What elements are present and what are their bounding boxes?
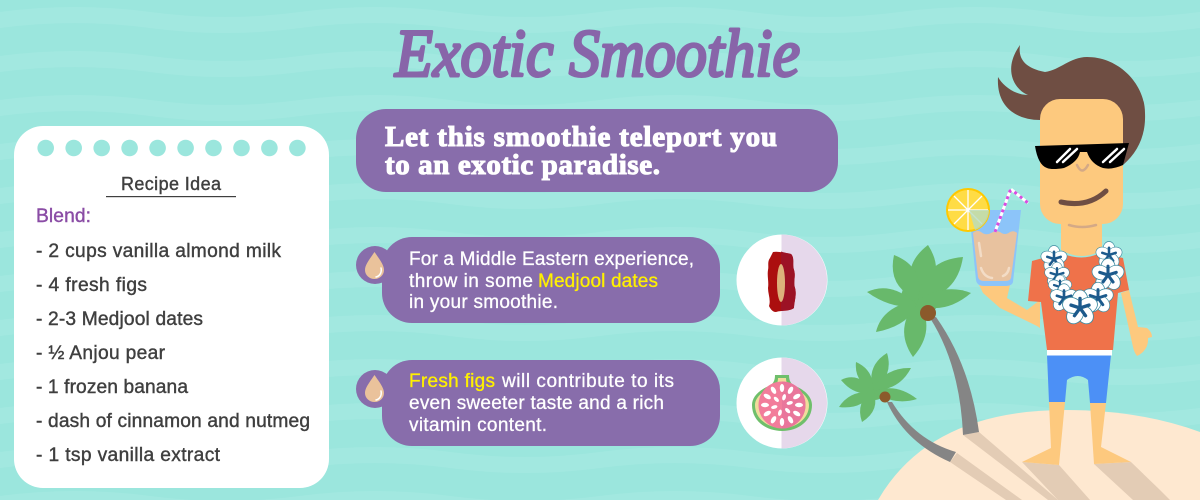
neck: [1061, 215, 1102, 256]
panel: intro banner: [356, 109, 838, 192]
ingredient list: - 2-3 Medjool dates: [36, 309, 203, 330]
panel: recipe card: [14, 126, 329, 488]
right arm: [1121, 290, 1152, 356]
title: Exotic Smoothie: [394, 15, 800, 91]
intro text: to an exotic paradise.: [385, 149, 660, 181]
panel: medjool dates callout: [356, 237, 720, 323]
ingredient list: - 4 fresh figs: [36, 275, 147, 296]
blend label: Blend:: [36, 206, 91, 227]
callout text: Fresh figs: [409, 371, 495, 392]
callout text: vitamin content.: [409, 415, 547, 436]
large palm tree: [867, 245, 979, 435]
hair: [998, 45, 1145, 165]
recipe heading: [106, 174, 236, 197]
nose: [1077, 165, 1088, 170]
icon: medjool date: [736, 234, 828, 326]
callout text: throw in some: [409, 271, 533, 292]
shadows on sand: [950, 432, 1170, 500]
callout text: For a Middle Eastern experience,: [409, 249, 694, 270]
ingredient list: - 1 frozen banana: [36, 377, 188, 398]
ingredient list: - 2 cups vanilla almond milk: [36, 241, 281, 262]
panel: fresh figs callout: [356, 360, 720, 446]
lemon slice: [946, 188, 990, 232]
sunglasses: [1035, 143, 1129, 169]
callout text: in your smoothie.: [409, 292, 558, 313]
intro text: Let this smoothie teleport you: [385, 121, 777, 153]
left arm: [979, 285, 1040, 328]
callout text: even sweeter taste and a rich: [409, 393, 664, 414]
shirt: [1028, 253, 1129, 350]
face: [1040, 99, 1123, 224]
flower lei: [1039, 242, 1126, 327]
character: man with smoothie: [946, 45, 1152, 465]
smile: [1061, 191, 1106, 204]
intro text: [385, 121, 777, 181]
small palm tree: [839, 353, 956, 462]
icon: drop: [365, 375, 384, 402]
callout text: [409, 249, 694, 313]
icon: drop: [365, 252, 384, 279]
neck crease: [1069, 225, 1096, 227]
notepad holes: [37, 140, 306, 156]
straw: [995, 190, 1028, 232]
icon: fig: [736, 358, 828, 448]
callout text: [409, 371, 674, 436]
recipe heading: Recipe Idea: [121, 174, 222, 194]
legs: [1022, 402, 1131, 465]
ingredient list: - dash of cinnamon and nutmeg: [36, 411, 310, 432]
callout text: will contribute to its: [501, 371, 674, 392]
belt: [1047, 350, 1112, 356]
ingredient list: [36, 241, 310, 466]
island: [878, 410, 1200, 500]
smoothie glass: [946, 188, 1028, 286]
callout text: Medjool dates: [538, 271, 658, 292]
shorts: [1047, 355, 1111, 403]
ingredient list: - 1 tsp vanilla extract: [36, 445, 221, 466]
ingredient list: - ½ Anjou pear: [36, 343, 166, 364]
